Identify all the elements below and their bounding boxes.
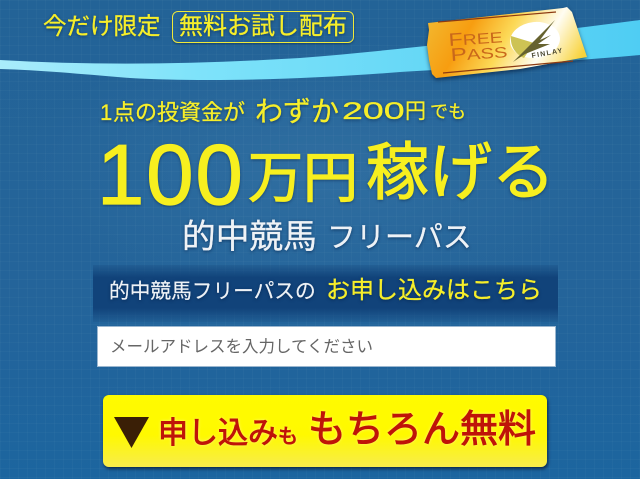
lead copy: 200 [342,98,405,125]
button small text: 申し込みも [158,417,298,450]
service name [182,218,472,256]
form heading yellow text: お申し込みはこちら [326,277,542,304]
icon: down triangle [114,417,149,448]
form heading band [93,265,558,322]
lead copy [100,96,466,127]
ticket: free pass: FREE [448,26,503,50]
lead copy: でも [430,102,466,122]
lead copy: 点の投資金が [113,100,245,125]
lead copy: 円 [405,100,426,123]
headline: 100 [97,128,245,223]
form heading white text: 的中競馬フリーパスの [109,280,316,303]
service name: 的中競馬 [182,218,317,256]
lead copy: わずか [255,96,339,127]
ticket: free pass: FINLAY [531,48,563,60]
lead copy: 1 [100,100,112,125]
submit button [103,395,547,467]
headline [97,128,555,223]
wave ribbon [0,20,640,80]
ticket: free pass: PASS [450,41,508,65]
headline: 万円 [248,147,358,209]
free trial badge: 無料お試し配布 [179,13,347,40]
ticket: free pass [424,7,589,82]
email input [97,326,556,367]
button large text: もちろん無料 [308,409,536,451]
email input: メールアドレスを入力してください [110,338,373,356]
promo label: 今だけ限定 [43,13,160,39]
service name: フリーパス [327,222,472,254]
headline: 稼げる [366,138,555,208]
